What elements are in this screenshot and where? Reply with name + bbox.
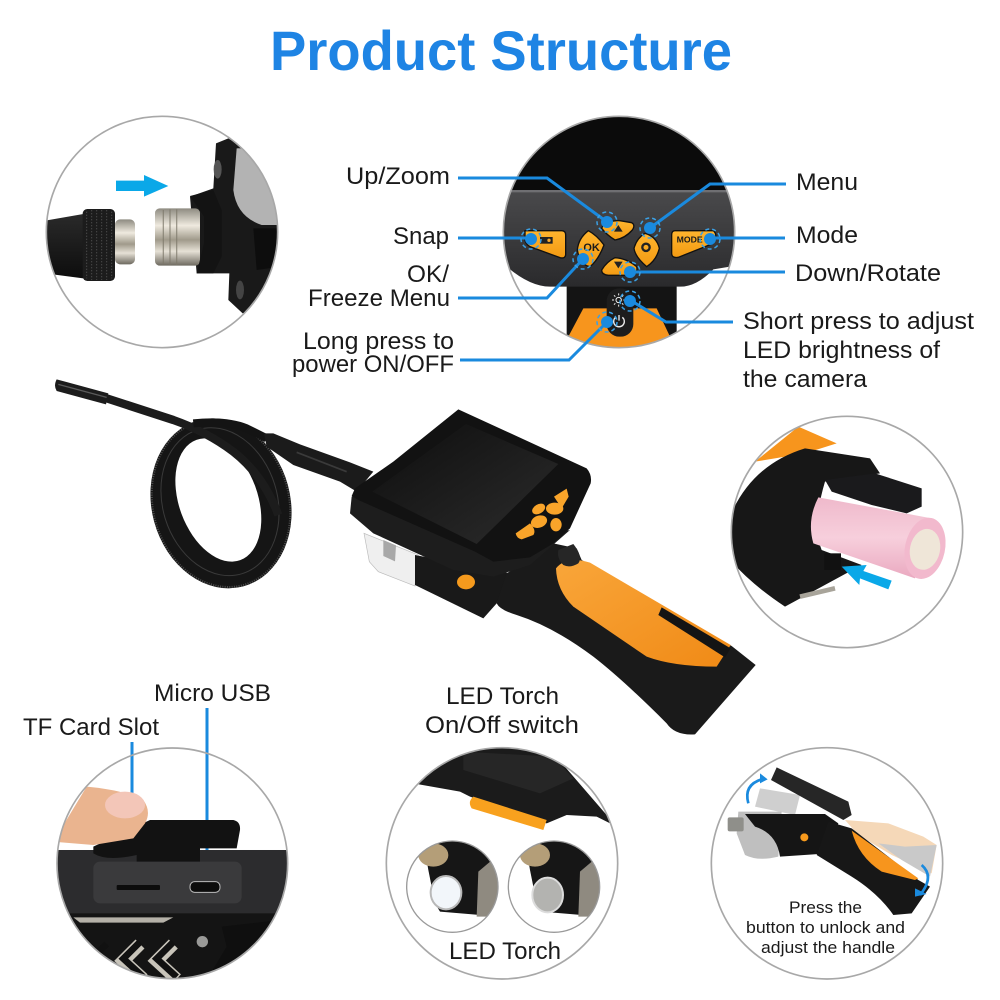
latch	[830, 553, 841, 558]
label: handle caption: adjust the handle	[761, 939, 895, 957]
circle outline	[731, 416, 963, 648]
label: TF Card Slot: TF Card Slot	[23, 714, 159, 741]
inset: torch off	[520, 840, 602, 917]
monitor side	[350, 490, 570, 577]
orange grip	[568, 308, 670, 350]
power pill	[607, 288, 633, 337]
callout leader lines	[132, 178, 786, 875]
black body	[725, 448, 880, 607]
plate holes	[214, 160, 222, 179]
coil	[132, 402, 310, 604]
mode button	[554, 489, 569, 508]
label: LED Torch caption: LED Torch	[449, 938, 561, 965]
panel: adjustable handle	[711, 748, 943, 979]
label: Mode: Mode	[796, 222, 858, 249]
lower body	[415, 555, 510, 618]
speaker grill	[383, 540, 396, 561]
label: Long press	[292, 328, 454, 378]
handle	[817, 822, 930, 915]
label: short press	[743, 308, 974, 393]
mode button	[672, 231, 716, 257]
handle neck	[566, 286, 677, 336]
chevrons	[123, 944, 177, 979]
battery cover	[825, 473, 922, 513]
callout markers	[120, 212, 720, 886]
label: Down/Rotate: Down/Rotate	[795, 260, 941, 287]
camera cable	[55, 379, 373, 604]
arrow head bottom	[915, 888, 927, 897]
silver strip	[73, 917, 173, 923]
snap button	[525, 231, 566, 258]
flange teeth	[190, 194, 214, 274]
title: Product Structure	[270, 19, 732, 82]
black camera plate	[190, 138, 280, 313]
down button	[550, 518, 562, 531]
power switch pill	[558, 544, 580, 566]
slot	[658, 607, 731, 657]
cable handle	[264, 433, 373, 492]
black handle	[413, 745, 617, 827]
label: short press: the camera	[743, 366, 868, 393]
orange switch	[470, 797, 547, 830]
label: OK / Freeze Menu: Freeze Menu	[308, 285, 450, 312]
monitor tilted	[771, 767, 852, 820]
OK button	[577, 231, 604, 267]
unlock button	[800, 833, 808, 841]
silver body	[737, 812, 782, 859]
label: Long press: Long press to	[303, 328, 454, 355]
label: OK / Freeze Menu: OK/	[407, 261, 449, 288]
label: OK / Freeze Menu	[308, 261, 450, 312]
TF slot	[117, 885, 160, 890]
label: Micro USB: Micro USB	[154, 680, 271, 707]
arrow head top	[760, 773, 768, 783]
cable end cylinder	[45, 214, 83, 278]
silver plate	[200, 920, 280, 987]
knurled collar	[83, 209, 115, 281]
label: LED Torch switch: On/Off switch	[425, 712, 579, 739]
circle outline	[386, 748, 618, 979]
gooseneck	[107, 398, 278, 515]
monitor face	[352, 409, 591, 562]
circle outline	[503, 116, 735, 348]
brightness icon	[612, 293, 625, 307]
USB port	[190, 882, 220, 892]
silver housing	[233, 148, 280, 225]
main device	[350, 409, 756, 734]
label: handle caption: Press the	[789, 899, 862, 917]
screen	[372, 424, 558, 544]
silver handle base	[364, 533, 418, 586]
snap button	[516, 523, 534, 539]
threaded socket	[155, 208, 200, 266]
label: handle caption: button to unlock and	[746, 919, 905, 937]
OK button	[529, 513, 549, 530]
label: handle caption	[746, 899, 905, 957]
blue arrow bottom	[920, 865, 928, 895]
black handle	[497, 543, 756, 734]
panel: LED torch	[386, 745, 618, 979]
label: short press: LED brightness of	[743, 337, 940, 364]
probe tip	[55, 379, 108, 404]
panel: cable connector detail	[45, 116, 280, 348]
label: LED Torch switch	[425, 683, 579, 739]
body	[53, 850, 293, 915]
panel: button close-up: MODE	[677, 235, 703, 245]
label: LED Torch switch: LED Torch	[446, 683, 559, 710]
circle outline	[57, 748, 288, 979]
ghost handle	[845, 820, 937, 873]
up button	[530, 501, 547, 517]
settings button	[634, 233, 659, 267]
orange grip	[556, 560, 731, 667]
port plate	[93, 862, 242, 903]
blue arrow top	[747, 779, 762, 803]
inset: torch on	[418, 840, 500, 917]
cable strain relief	[193, 422, 267, 438]
label: short press: Short press to adjust	[743, 308, 974, 335]
panel: button close-up: OK	[583, 242, 600, 254]
power icon	[614, 315, 624, 327]
orange grip	[852, 831, 918, 880]
screw	[197, 936, 208, 947]
arrow	[842, 565, 892, 589]
ghost grey monitor	[755, 788, 800, 815]
label: Menu: Menu	[796, 169, 858, 196]
camera glyph	[540, 237, 553, 244]
unlock button	[457, 575, 475, 589]
connector	[728, 817, 744, 831]
arrow	[116, 175, 168, 197]
finger	[53, 787, 148, 845]
orange grip	[755, 427, 837, 462]
circle outline	[46, 116, 278, 348]
label: Up/Zoom: Up/Zoom	[346, 163, 450, 190]
battery terminal	[910, 528, 940, 570]
panel: battery compartment	[725, 416, 963, 648]
rubber flap	[93, 820, 240, 865]
screen	[512, 117, 726, 190]
label: Long press: power ON/OFF	[292, 351, 454, 378]
circle outline	[711, 748, 943, 979]
inset outlines	[407, 841, 600, 932]
silver plug tip	[115, 219, 135, 264]
metal clasp	[800, 588, 835, 597]
up button	[602, 221, 634, 240]
label: Snap: Snap	[393, 223, 449, 250]
down button	[602, 258, 637, 275]
settings button	[546, 503, 563, 515]
black body	[745, 814, 838, 857]
battery cylinder	[811, 497, 932, 578]
bezel	[500, 190, 740, 287]
panel: button close-up	[500, 110, 740, 350]
panel: ports	[53, 748, 293, 987]
